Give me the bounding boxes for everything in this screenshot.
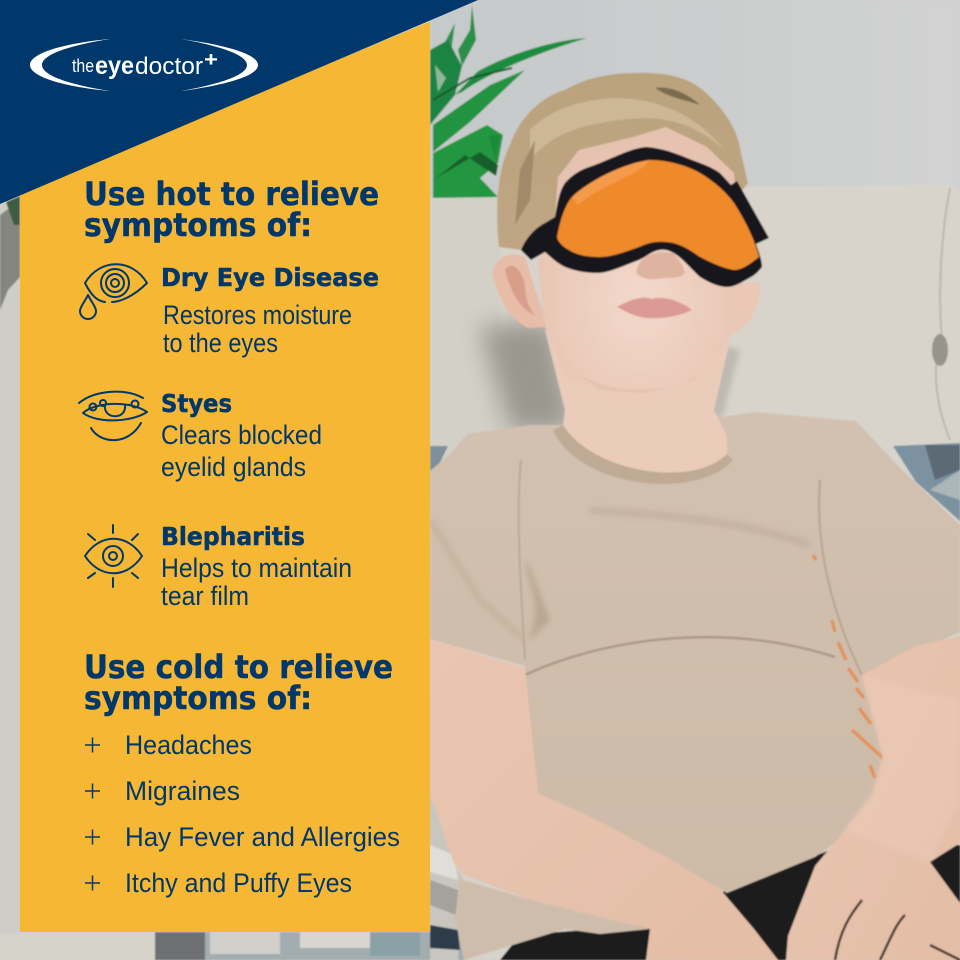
shirt folds [526,560,550,640]
icon: eye with tear [80,264,147,319]
item: dry eye disease: to the eyes [163,328,278,358]
plant [430,5,587,198]
logo: the eye doctor [30,39,258,91]
right arm and hand [786,636,960,960]
item: blepharitis: Blepharitis [161,522,305,551]
heading: use cold: Use cold to relieve [84,648,393,686]
item: styes: Styes [161,389,232,418]
heading: use hot: symptoms of: [84,206,312,244]
hair [497,73,748,250]
list: cold symptoms: Headaches [125,730,252,760]
orange strap marks [813,555,883,778]
item: blepharitis: Helps to maintain [161,553,352,583]
shorts [500,845,960,960]
shirt tail [455,879,650,960]
item: blepharitis: tear film [161,581,249,611]
striped pillow [893,443,960,521]
blanket by left arm [430,793,464,960]
item: dry eye disease: Restores moisture [163,300,352,330]
far left sofa edge [0,204,20,934]
logo: the eye doctor: doctor [135,53,203,80]
panel: yellow content panel [20,22,430,932]
left arm and hand [430,639,778,960]
item: styes: eyelid glands [161,452,306,482]
item: blepharitis [161,522,352,611]
list: cold symptoms [85,730,400,898]
logo: the eye doctor: + [204,49,218,71]
ears [492,254,547,328]
sofa back [430,185,960,470]
nose [636,252,685,279]
heading: use cold [84,648,393,717]
icon: eye with styes [79,392,147,440]
neck [545,330,730,473]
collar [553,425,733,484]
list: cold symptoms: Migraines [125,776,240,806]
icon: eye with rays [85,525,142,587]
face [538,127,742,393]
item: dry eye disease [161,263,379,358]
heading: use hot [84,175,379,244]
list: cold symptoms: Itchy and Puffy Eyes [125,868,352,898]
eye mask [521,147,769,287]
list: cold symptoms: Hay Fever and Allergies [125,822,400,852]
fingers gaps [835,900,960,960]
shirt [430,412,960,893]
navy corner banner [0,0,478,204]
item: styes: Clears blocked [161,420,322,450]
sofa shadow behind boy [480,320,575,432]
mouth [617,298,692,318]
logo: the eye doctor: the [72,56,94,76]
blanket bottom left [155,932,465,960]
heading: use cold: symptoms of: [84,679,312,717]
heading: use hot: Use hot to relieve [84,175,379,213]
item: dry eye disease: Dry Eye Disease [161,263,379,292]
item: styes [161,389,322,482]
logo: the eye doctor: eye [95,52,134,80]
